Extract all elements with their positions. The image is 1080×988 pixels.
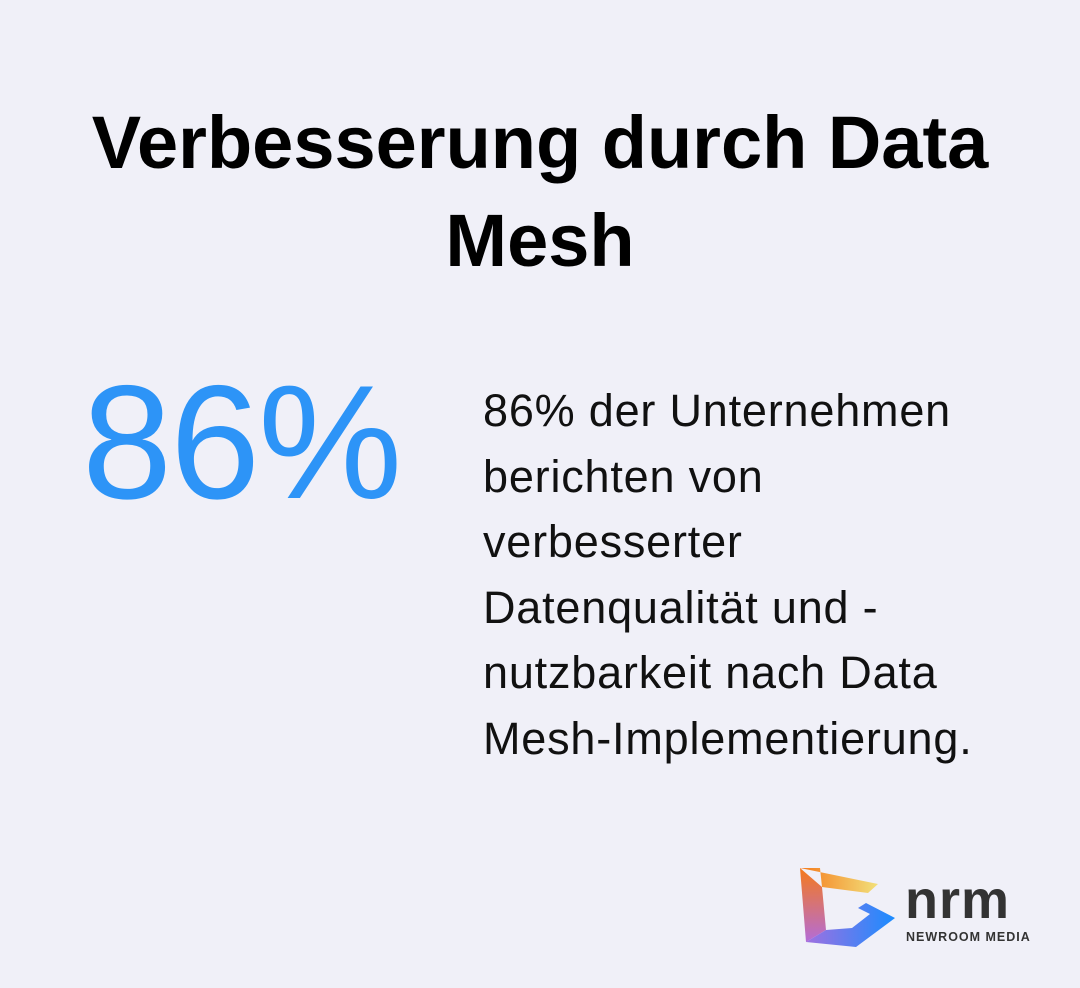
description text: verbesserter [483,516,743,567]
title: Verbesserung durch Data [92,101,988,184]
big stat: 86% [82,352,400,533]
logo: newroom media [800,868,1031,947]
logo: newroom media: nrm [905,870,1010,930]
description text: Mesh-Implementierung. [483,712,972,764]
description text [483,385,972,764]
description text: nutzbarkeit nach Data [483,647,938,698]
title [92,101,989,282]
logo: newroom media: NEWROOM MEDIA [906,930,1031,944]
description text: berichten von [483,450,764,502]
title: Mesh [445,199,635,282]
description text: 86% der Unternehmen [483,385,951,436]
description text: Datenqualität und - [483,582,878,632]
